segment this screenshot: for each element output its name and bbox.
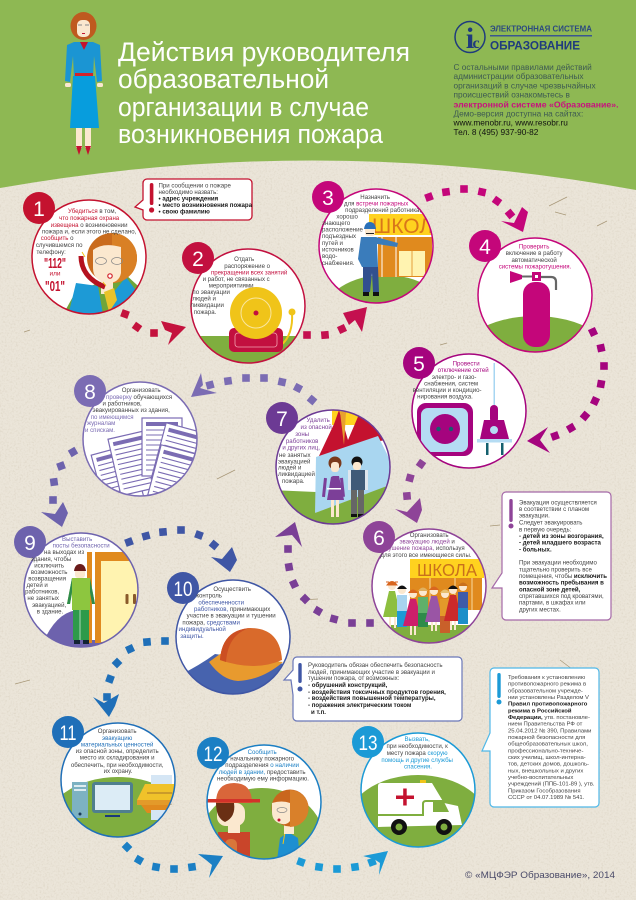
callout text: Федерации, утв. постановле- bbox=[508, 715, 590, 721]
number badge 11 bbox=[52, 716, 84, 748]
step 7 text: ликвидацией bbox=[278, 471, 315, 478]
step 3 text: водо- bbox=[322, 253, 337, 260]
step 10 text: пожара, средствами bbox=[182, 620, 240, 626]
illustration: alarm bell bbox=[200, 287, 296, 362]
step 7 text: работников bbox=[286, 438, 318, 445]
emergency numbers: "01" bbox=[45, 278, 65, 295]
logo: electronic system Obrazovanie: ЭЛЕКТРОННАЯ СИСТЕМА bbox=[490, 24, 592, 34]
illustration: ambulance bbox=[362, 775, 474, 846]
title: Действия руководителя bbox=[118, 37, 410, 67]
callout text: Требования к установлению bbox=[508, 675, 586, 681]
panel: step 3 bbox=[312, 181, 434, 304]
illustration: guard at exit door bbox=[47, 552, 138, 646]
step 11 text: эвакуацию bbox=[102, 735, 133, 742]
arrow 2 to 3 bbox=[303, 307, 367, 339]
illustration: computer and valuables bbox=[64, 775, 174, 836]
callout text: тщательно проверить все bbox=[519, 566, 592, 573]
step 7 text: из опасной bbox=[301, 424, 332, 431]
callout: evacuation rules bbox=[492, 492, 611, 620]
callout text: режима в Российской bbox=[508, 707, 572, 714]
step 12 text: людей в здании, предоставить bbox=[219, 769, 306, 776]
step 12 text: подразделения о наличии bbox=[225, 762, 299, 769]
arrow 9 to 10 bbox=[124, 526, 237, 572]
arrow 3 to 4 bbox=[424, 185, 528, 232]
callout text: Следует эвакуировать bbox=[519, 520, 582, 527]
illustration: woman calling on the phone bbox=[66, 233, 138, 314]
arrow 4 to 5 bbox=[527, 327, 608, 453]
callout text: необходимо назвать: bbox=[158, 189, 218, 196]
illustration: school and children: ШКОЛА bbox=[417, 560, 477, 580]
step 9 text: Выставить bbox=[62, 536, 92, 543]
panel: step 6 bbox=[363, 521, 490, 650]
step 1 text: Убедиться в том, bbox=[68, 208, 116, 215]
panel: step 12 bbox=[197, 737, 322, 860]
info text block: Тел. 8 (495) 937-90-82 bbox=[454, 127, 539, 137]
callout text: людей, принимающих участие в эвакуации и bbox=[308, 669, 435, 676]
logo: electronic system Obrazovanie: c bbox=[472, 35, 480, 52]
step 8 text: проверку обучающихся bbox=[106, 394, 172, 401]
info text block: администрации образовательных bbox=[454, 71, 584, 81]
step 1 text: пожара и, если этого не сделано, bbox=[42, 228, 137, 236]
step 9 text: эвакуацией, bbox=[32, 602, 67, 609]
callout text: Приказом Гособразования bbox=[508, 788, 581, 794]
step 2 text: и работ, не связанных с bbox=[203, 276, 270, 283]
callout text: общеобразовательных школ, bbox=[508, 742, 588, 748]
step 4 text: Проверить bbox=[519, 244, 549, 250]
step 3 text: для встречи пожарных bbox=[344, 200, 408, 208]
step 6 text: Организовать bbox=[410, 532, 449, 539]
number badge 13 bbox=[352, 726, 384, 758]
callout text: При сообщении о пожаре bbox=[158, 182, 232, 190]
info text block: электронной системе «Образование». bbox=[454, 100, 618, 110]
step 13 text: при необходимости, к bbox=[386, 743, 448, 750]
step 2 text: Отдать bbox=[234, 256, 254, 263]
arrow 8 to 9 bbox=[41, 447, 78, 527]
callout text: опасной зоне детей, bbox=[519, 586, 581, 593]
callout text: • свою фамилию bbox=[158, 208, 210, 216]
title: организации в случае bbox=[118, 92, 369, 122]
step 7 text: не занятых bbox=[279, 452, 311, 459]
number badge 3: 3 bbox=[322, 187, 334, 210]
step 9 text: работников, bbox=[25, 588, 60, 596]
step 3 text: хорошо bbox=[336, 214, 358, 220]
panel: step 1 bbox=[23, 192, 147, 315]
step 5 text: нирования воздуха. bbox=[417, 394, 473, 400]
step 2 text: пожара. bbox=[194, 309, 217, 316]
number badge 6: 6 bbox=[373, 527, 385, 550]
number badge 11: 11 bbox=[60, 722, 76, 745]
callout text: учреждений (ППБ-101-89 ), утв. bbox=[508, 781, 595, 788]
step 10 text: Осуществить bbox=[213, 586, 251, 593]
step 5 text: снабжения, систем bbox=[424, 380, 478, 388]
step 5 text: отключение сетей bbox=[438, 367, 489, 374]
step 3 text: подъездных bbox=[322, 233, 356, 240]
number badge 5: 5 bbox=[413, 353, 425, 376]
number badge 12 bbox=[197, 737, 229, 769]
callout text: учебно-воспитательных bbox=[508, 775, 573, 781]
panel: step 11 bbox=[52, 716, 176, 838]
step 7 text: Удалить bbox=[307, 417, 330, 424]
step 12 text: начальнику пожарного bbox=[230, 756, 295, 762]
step 3 text: Назначить bbox=[360, 194, 390, 201]
callout text: нии установлены Разделом V bbox=[508, 695, 589, 701]
panel: step 4 bbox=[469, 230, 593, 353]
illustration: fire extinguisher bbox=[488, 271, 582, 352]
icon: exclamation mark bbox=[496, 673, 502, 704]
step 10 text: защиты. bbox=[180, 633, 204, 640]
step 3 text: расположение bbox=[322, 226, 364, 234]
illustration: people leaving fire zone bbox=[282, 410, 390, 524]
header green band bbox=[0, 0, 636, 190]
callout text: и т.п. bbox=[311, 709, 326, 716]
callout text: ных, внешкольных и других bbox=[508, 768, 583, 774]
callout text: СССР от 04.07.1989 № 541. bbox=[508, 794, 585, 801]
step 13 text: месту пожара скорую bbox=[387, 750, 448, 757]
callout text: - поражения электрическим током bbox=[308, 702, 412, 709]
callout text: 25.04.2012 № 390, Правилами bbox=[508, 727, 591, 734]
icon: exclamation mark bbox=[149, 183, 154, 213]
callout text: образовательном учрежде- bbox=[508, 688, 583, 694]
number badge 13: 13 bbox=[358, 732, 378, 755]
callout text: - детей из зоны возгорания, bbox=[519, 533, 604, 540]
illustration: fire chief and manager bbox=[208, 783, 318, 858]
step 7 text: эвакуацией bbox=[278, 458, 310, 466]
step 7 text: пожара. bbox=[282, 478, 305, 485]
callout text: ских училищ, школ-интерна- bbox=[508, 755, 586, 761]
callout text: помещения, чтобы исключить bbox=[519, 573, 607, 580]
callout text: профессионально-техниче- bbox=[508, 748, 583, 754]
step 10 text: работников, принимающих bbox=[194, 606, 270, 613]
info text block: организаций в случае чрезвычайных bbox=[454, 80, 597, 90]
step 11 text: Организовать bbox=[98, 728, 137, 735]
step 6 text: эвакуацию людей и bbox=[399, 538, 455, 546]
step 9 text: исключить bbox=[34, 562, 64, 570]
callout text: • место возникновения пожара bbox=[158, 202, 253, 209]
callout text: - воздействия повышенной температуры, bbox=[308, 695, 436, 702]
illustration: school and guide: ШКОЛ bbox=[372, 215, 433, 238]
step 10 text: контроль bbox=[196, 592, 222, 600]
step 10 text: участие в эвакуации и тушении bbox=[187, 612, 276, 620]
step 9 text: на выходах из bbox=[44, 549, 84, 556]
step 2 text: прекращении всех занятий bbox=[211, 270, 287, 276]
step 5 text: электро- и газо- bbox=[432, 374, 476, 381]
step 9 text: возможность bbox=[31, 569, 67, 576]
step 1 text: телефону: bbox=[36, 249, 66, 256]
callout text: - воздействия токсичных продуктов горения, bbox=[308, 689, 446, 696]
callout text: Эвакуация осуществляется bbox=[519, 499, 597, 506]
step 4 text: включение в работу bbox=[506, 250, 563, 257]
step 3 text: знающего bbox=[322, 220, 351, 227]
step 11 text: обеспечить, при необходимости, bbox=[71, 762, 164, 769]
step 13 text: Вызвать, bbox=[404, 736, 430, 743]
number badge 10: 10 bbox=[174, 578, 192, 601]
arrow 6 to 7 bbox=[275, 522, 374, 627]
step 5 text: Провести bbox=[453, 360, 480, 368]
callout text: Правил противопожарного bbox=[508, 702, 588, 708]
copyright footer: © «МЦФЭР Образование», 2014 bbox=[465, 870, 615, 881]
step 6 text: тушение пожара, используя bbox=[386, 545, 465, 552]
step 8 text: и работников, bbox=[103, 400, 142, 408]
arrow 11 to 12 bbox=[122, 842, 223, 878]
number badge 7: 7 bbox=[276, 408, 288, 431]
number badge 4: 4 bbox=[479, 236, 491, 259]
icon: exclamation mark bbox=[298, 663, 302, 692]
callout text: в первую очередь: bbox=[519, 526, 572, 533]
emergency numbers: "112" bbox=[44, 255, 66, 272]
step 6 text: для этого все имеющиеся силы. bbox=[380, 552, 472, 559]
callout text: При эвакуации необходимо bbox=[519, 560, 597, 567]
info text block: Демо-версия доступна на сайтах: bbox=[454, 108, 583, 118]
logo: electronic system Obrazovanie: ОБРАЗОВАНИЕ bbox=[490, 38, 580, 52]
arrow 5 to 6 bbox=[395, 459, 426, 523]
step 1 text: сообщить о bbox=[41, 235, 74, 242]
callout text: противопожарного режима в bbox=[508, 682, 586, 688]
callout text: спрятавшихся под кроватями, bbox=[519, 593, 604, 600]
illustration: socket and plug bbox=[417, 363, 512, 456]
step 7 text: людей и bbox=[278, 464, 301, 472]
info text block: www.menobr.ru, www.resobr.ru bbox=[452, 118, 568, 128]
illustration: helmet bbox=[188, 628, 283, 694]
step 9 text: здания, чтобы bbox=[31, 556, 71, 563]
step 7 text: и других лиц, bbox=[282, 444, 320, 452]
panel: step 7 bbox=[266, 402, 391, 525]
step 2 text: распоряжение о bbox=[224, 263, 271, 270]
number badge 1 bbox=[23, 192, 55, 224]
step 12 text: Сообщить bbox=[248, 749, 277, 756]
logo: electronic system Obrazovanie bbox=[455, 22, 592, 55]
number badge 8: 8 bbox=[84, 381, 96, 404]
arrow 10 to 11 bbox=[93, 637, 169, 717]
callout text: других местах. bbox=[519, 606, 561, 613]
step 2 text: ликвидации bbox=[190, 302, 224, 309]
arrow 7 to 8 bbox=[191, 373, 317, 405]
title: возникновения пожара bbox=[118, 119, 383, 149]
illustration: woman manager bbox=[65, 12, 103, 155]
number badge 3 bbox=[312, 181, 344, 213]
step 3 text: путей и bbox=[322, 240, 343, 247]
step 5 text: вентиляции и кондицио- bbox=[413, 387, 482, 394]
info text block: происшествий ознакомьтесь в bbox=[454, 90, 571, 100]
number badge 1: 1 bbox=[33, 198, 45, 221]
callout text: пожарной безопасности для bbox=[508, 734, 585, 741]
callout text: - больных. bbox=[519, 546, 552, 553]
arrow 12 to 13 bbox=[296, 851, 388, 875]
step 3 text: подразделений работника, bbox=[345, 207, 421, 214]
callout text: Руководитель обязан обеспечить безопасность bbox=[308, 662, 443, 669]
step 9 text: детей и bbox=[26, 582, 48, 589]
step 2 text: мероприятиями bbox=[209, 282, 254, 290]
step 11 text: материальных ценностей bbox=[81, 742, 153, 748]
step 13 text: спасения. bbox=[404, 764, 432, 770]
step 13 text: помощь и другие службы bbox=[381, 757, 453, 764]
illustration: school and guide bbox=[339, 214, 432, 302]
callout text: • адрес учреждения bbox=[158, 196, 219, 202]
number badge 12: 12 bbox=[204, 743, 222, 766]
number badge 2: 2 bbox=[192, 248, 204, 271]
step 11 text: их охрану. bbox=[104, 768, 133, 775]
step 11 text: место их складирования и bbox=[80, 754, 155, 762]
emergency numbers bbox=[44, 255, 66, 295]
panel: step 5 bbox=[403, 347, 526, 468]
icon: exclamation mark bbox=[508, 499, 514, 528]
step 1 text: случившемся по bbox=[36, 242, 83, 249]
step 9 text: не занятых bbox=[27, 595, 59, 602]
step 11 text: из опасной зоны, определить bbox=[76, 748, 159, 755]
callout text: - детей младшего возраста bbox=[519, 540, 602, 547]
title: образовательной bbox=[118, 64, 329, 94]
step 10 text: индивидуальной bbox=[179, 626, 226, 633]
title bbox=[118, 37, 410, 149]
illustration: stack of lists bbox=[90, 417, 196, 496]
number badge 4 bbox=[469, 230, 501, 262]
info text block: С остальными правилами действий bbox=[454, 62, 592, 72]
callout text: возможность пребывания в bbox=[519, 580, 604, 587]
callout: what to report bbox=[135, 179, 254, 220]
step 9 text: возвращения bbox=[28, 576, 66, 582]
step 1 text: что пожарная охрана bbox=[59, 215, 120, 222]
callout text: - обрушений конструкций, bbox=[308, 682, 388, 689]
emergency numbers: или bbox=[49, 270, 61, 278]
callout text: в соответствии с планом bbox=[519, 506, 589, 513]
panel: step 8 bbox=[74, 375, 198, 497]
callout text: тушении пожара, от возможных: bbox=[308, 675, 400, 682]
step 9 text: посты безопасности bbox=[53, 542, 110, 550]
callout text: нием Правительства РФ от bbox=[508, 722, 583, 728]
logo: electronic system Obrazovanie: i bbox=[466, 22, 474, 55]
callout text: тов, детских домов, дошколь- bbox=[508, 762, 589, 768]
step 3 text: источников bbox=[322, 246, 354, 254]
step 9 text: в здание. bbox=[37, 608, 63, 616]
callout: legal requirements bbox=[482, 668, 599, 807]
step 10 text: обеспеченности bbox=[198, 600, 244, 606]
step 8 text: эвакуированных из здания, bbox=[92, 407, 170, 414]
step 1 text: извещена о возникновении bbox=[51, 222, 128, 229]
number badge 9: 9 bbox=[24, 532, 36, 555]
panel: step 13 bbox=[352, 726, 476, 848]
arrow 1 to 2 bbox=[120, 309, 186, 345]
step 8 text: Организовать bbox=[122, 387, 161, 394]
step 2 text: людей и bbox=[192, 296, 216, 302]
step 4 text: автоматической bbox=[511, 257, 557, 264]
callout text: партами, в шкафах или bbox=[519, 600, 586, 607]
panel: step 2 bbox=[182, 242, 315, 366]
panel: step 10 bbox=[167, 572, 295, 700]
step 8 text: и спискам. bbox=[85, 427, 115, 434]
step 3 text: снабжения. bbox=[322, 260, 355, 267]
callout text: эвакуации. bbox=[519, 513, 550, 520]
panel: step 9 bbox=[14, 526, 140, 650]
step 12 text: необходимую ему информацию. bbox=[217, 776, 309, 782]
step 8 text: журналам bbox=[87, 420, 115, 427]
step 8 text: по имеющимся bbox=[91, 414, 134, 421]
step 7 text: зоны bbox=[295, 431, 309, 438]
step 2 text: по эвакуации bbox=[192, 289, 230, 296]
callout: protection of evacuation participants bbox=[284, 657, 462, 721]
step 4 text: системы пожаротушения. bbox=[499, 264, 572, 271]
